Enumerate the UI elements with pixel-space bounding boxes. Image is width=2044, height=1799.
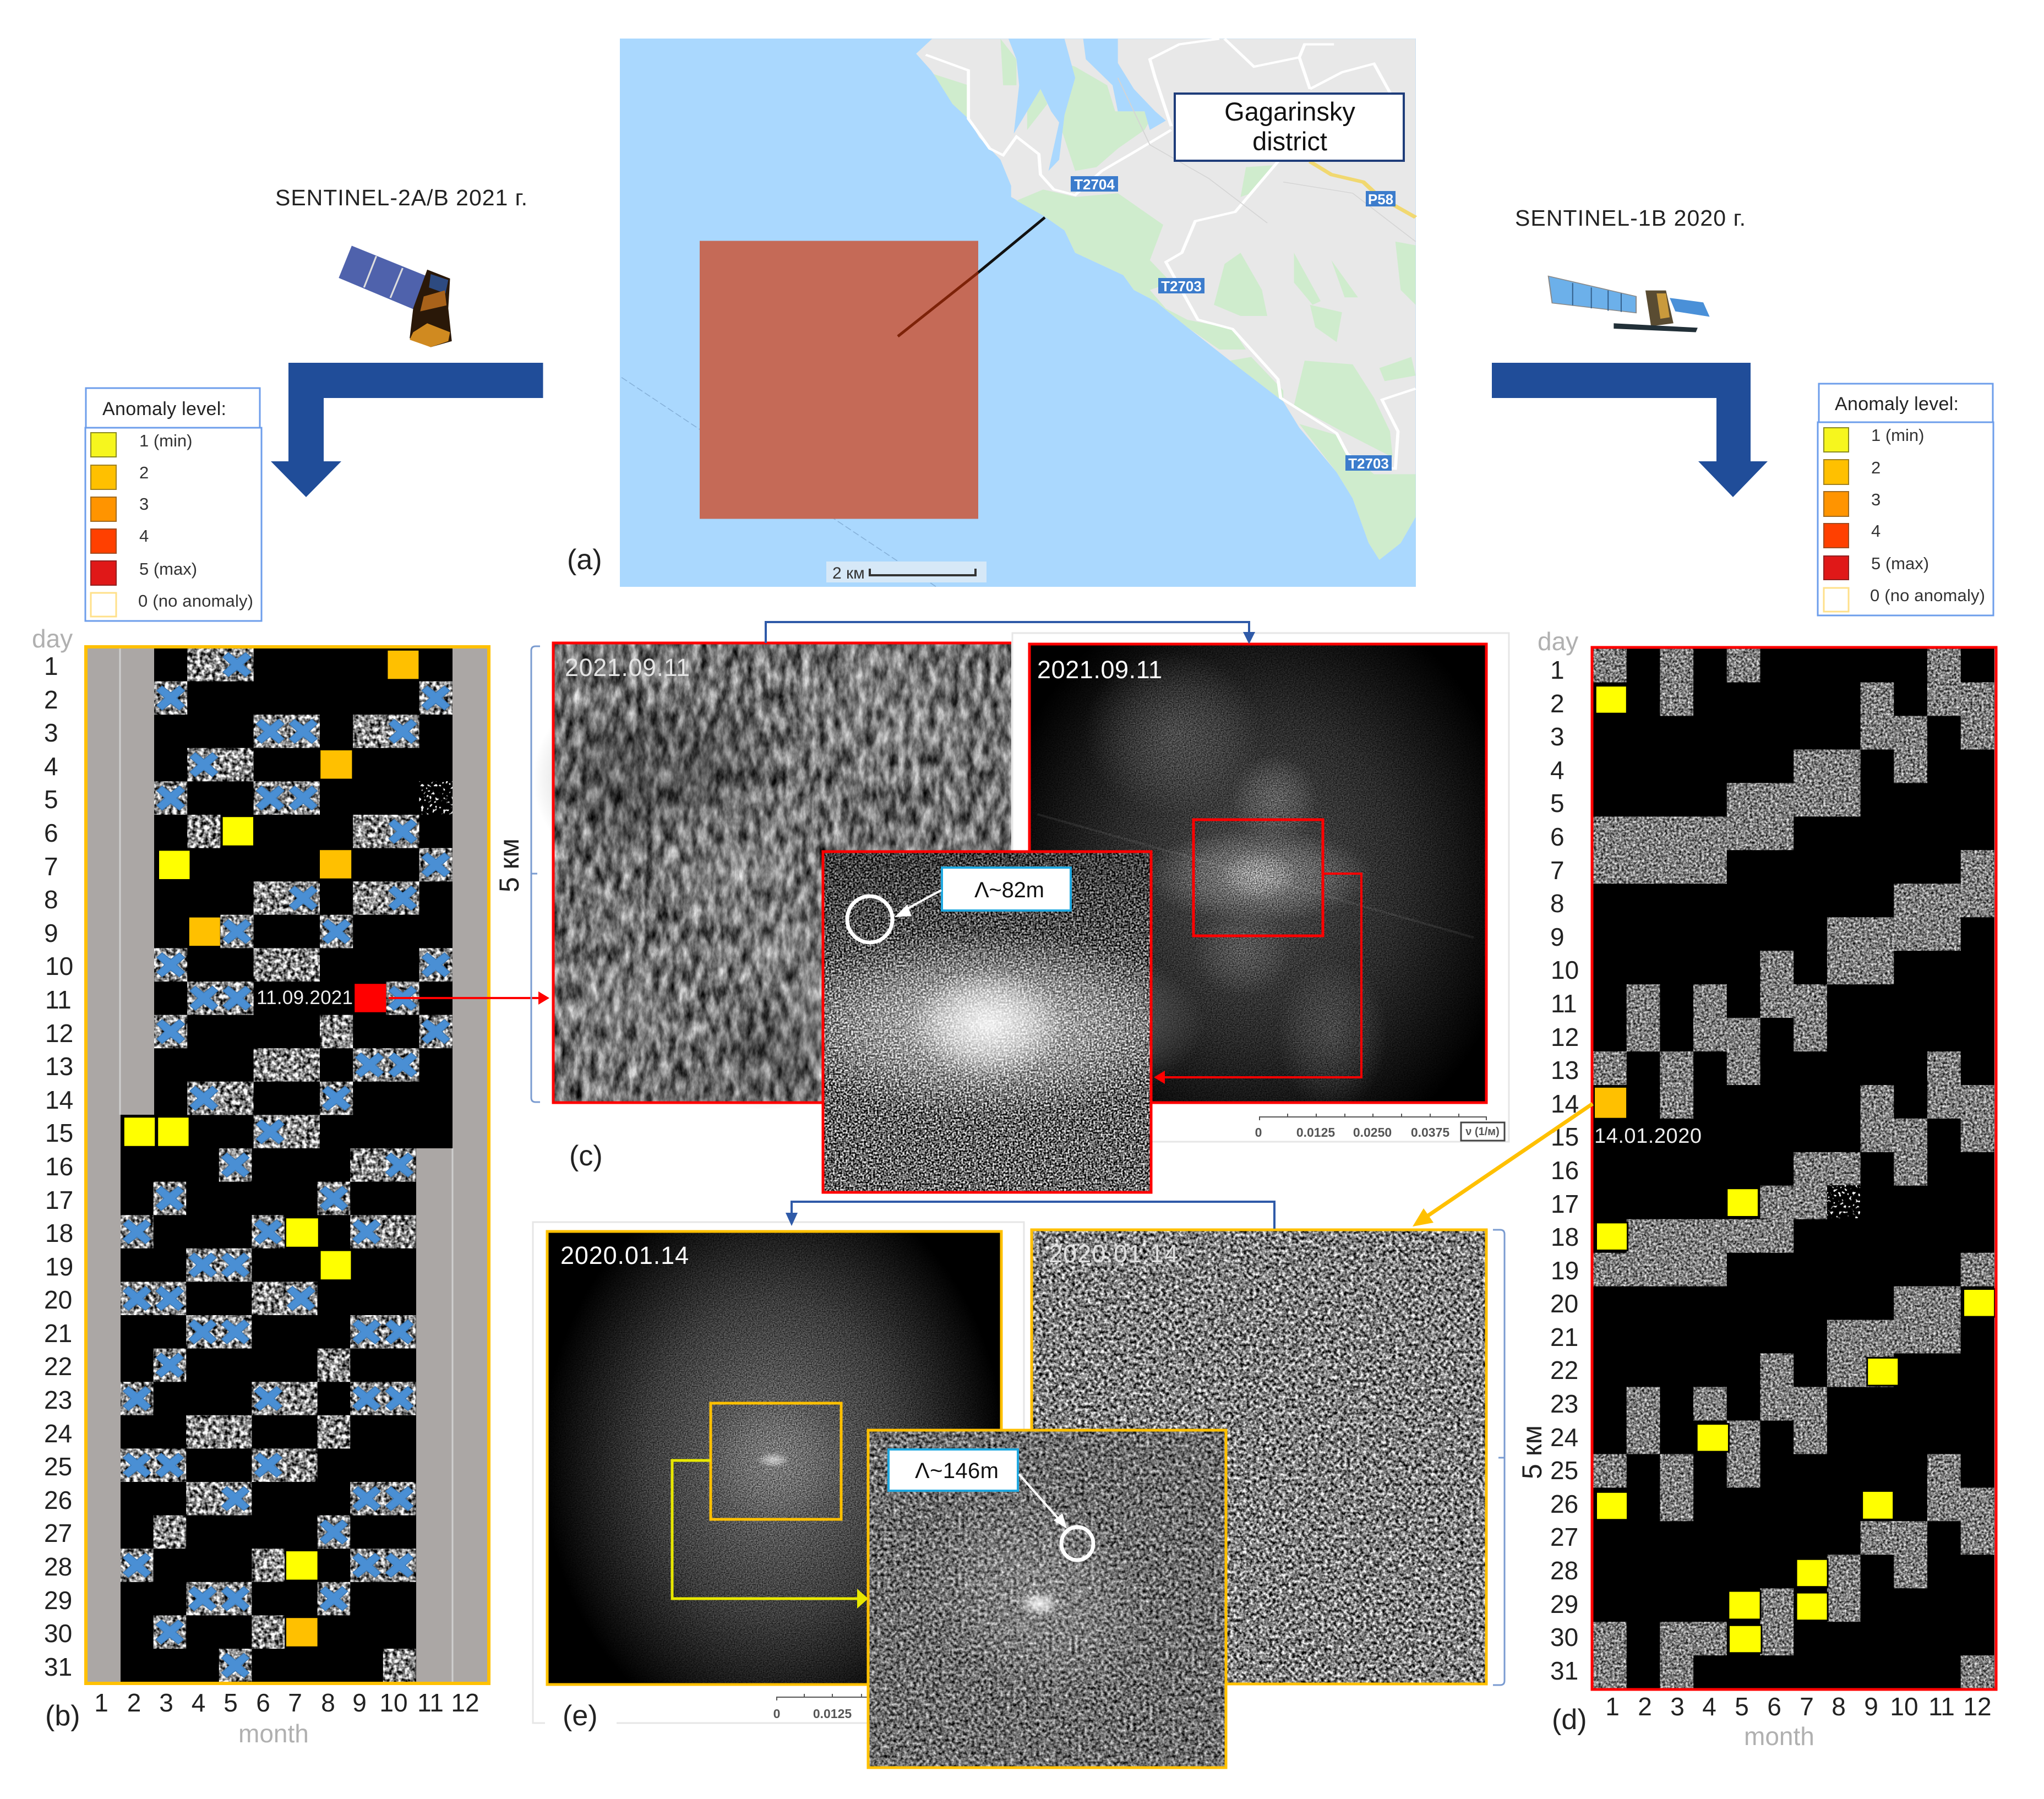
day numbers: 31 (44, 1653, 72, 1681)
legend: left anomaly level: Anomaly level: (102, 399, 226, 419)
month numbers: 5 (224, 1688, 238, 1717)
month numbers: 5 (1735, 1692, 1749, 1721)
callout pointer (895, 890, 941, 917)
spectrum image e: 2020.01.14 (560, 1241, 689, 1269)
day numbers: 17 (45, 1186, 73, 1214)
month numbers: 1 (1605, 1692, 1620, 1721)
month numbers: 10 (1890, 1692, 1918, 1721)
callout: wavelength 146 m (889, 1449, 1018, 1491)
dimension: 5 km left: 5 км (494, 838, 525, 892)
spectrum image e (547, 1231, 1001, 1684)
legend: right anomaly level: 3 (1871, 490, 1881, 509)
month numbers: 7 (288, 1688, 302, 1717)
leader line (898, 217, 1045, 336)
road sign T2703 south: T2703 (1348, 455, 1389, 472)
spectrum scale bar e (773, 1694, 881, 1721)
day numbers: 2 (1550, 689, 1565, 718)
month numbers: 12 (451, 1688, 479, 1717)
day numbers: 12 (45, 1019, 73, 1048)
zoom box on spectrum (1193, 820, 1323, 936)
panel b border (86, 647, 489, 1683)
legend: right anomaly level: 1 (min) (1871, 426, 1924, 445)
day numbers: 23 (44, 1386, 72, 1414)
label (b): (b) (45, 1700, 80, 1732)
day numbers: 16 (45, 1152, 73, 1181)
dimension: 5 km right (1493, 1230, 1547, 1685)
day numbers: 16 (1551, 1156, 1579, 1185)
spectrum frame (1012, 633, 1509, 1142)
heading: Sentinel-1B: SENTINEL-1B 2020 г. (1515, 205, 1746, 231)
road sign T2703: T2703 (1161, 278, 1202, 295)
map green areas (934, 39, 1416, 560)
panel d border (1592, 647, 1996, 1689)
day numbers: 9 (44, 919, 58, 947)
label: Gagarinsky district (1175, 94, 1404, 161)
day numbers: 11 (45, 985, 72, 1014)
month numbers: 4 (192, 1688, 205, 1717)
day numbers: 1 (44, 652, 58, 680)
spectrum scale bar e: 0.0125 (813, 1707, 852, 1721)
zoom box on spectrum e (711, 1403, 841, 1519)
label: Gagarinsky district: Gagarinsky (1224, 97, 1355, 126)
yellow connector (672, 1460, 868, 1609)
day numbers: 8 (44, 885, 58, 914)
month numbers: 10 (379, 1688, 408, 1717)
legend: right anomaly level: Anomaly level: (1835, 394, 1959, 415)
day numbers: 12 (1551, 1023, 1579, 1051)
month numbers: 3 (1670, 1692, 1685, 1721)
day numbers: 28 (1550, 1556, 1578, 1585)
day numbers: 6 (1550, 822, 1565, 851)
spectrum scale bar e: 0 (773, 1707, 780, 1721)
day numbers: 18 (1551, 1223, 1579, 1251)
day numbers: 17 (1551, 1190, 1579, 1218)
legend: left anomaly level: 4 (139, 526, 149, 546)
spectrum frame e (533, 1222, 1024, 1723)
panel (d): Sentinel-1 calendar (1538, 627, 1996, 1751)
spectrum scale bar c: ν (1/м) (1465, 1126, 1500, 1138)
spectrum image c: 2021.09.11 (1037, 656, 1162, 684)
day numbers: 11 (1551, 989, 1577, 1018)
day numbers: 5 (1550, 789, 1565, 817)
month numbers: 6 (256, 1688, 270, 1717)
zoomed inset e (868, 1430, 1226, 1768)
day numbers: 20 (44, 1285, 72, 1314)
day numbers: 5 (44, 785, 58, 814)
day numbers: 10 (45, 952, 73, 980)
blue bracket: panel c (766, 622, 1255, 644)
day numbers: 9 (1550, 923, 1565, 951)
day numbers: 21 (44, 1319, 72, 1348)
day numbers: 15 (45, 1119, 73, 1147)
day numbers: 14 (1551, 1089, 1579, 1118)
legend: left anomaly level: 5 (max) (139, 559, 197, 579)
heading: Sentinel-2A/B: SENTINEL-2A/B 2021 г. (275, 185, 527, 210)
day numbers: 7 (1550, 856, 1565, 885)
SAR image e: 2020.01.14 (1049, 1240, 1178, 1268)
axis title: day: day (32, 624, 73, 653)
legend: left anomaly level: 1 (min) (139, 431, 192, 450)
legend: right anomaly level: 2 (1871, 458, 1881, 477)
dimension: 5 km left (494, 646, 540, 1102)
day numbers: 19 (1551, 1256, 1579, 1285)
axis title: day: day (1538, 627, 1578, 656)
map land (916, 39, 1416, 560)
legend: left anomaly level: 3 (139, 494, 149, 514)
day numbers: 3 (44, 718, 58, 747)
label (d): (d) (1552, 1704, 1587, 1736)
month numbers (1605, 1692, 1992, 1721)
scale bar (826, 561, 986, 582)
day numbers: 25 (1550, 1456, 1578, 1485)
day numbers: 28 (44, 1552, 72, 1581)
day numbers: 24 (44, 1419, 72, 1448)
map inlets (1009, 39, 1166, 171)
day numbers: 15 (1551, 1122, 1579, 1151)
calendar grid b (88, 648, 487, 1682)
date label 11.09.2021: 11.09.2021 (257, 987, 353, 1008)
day numbers: 4 (44, 752, 58, 781)
arrow: right blue elbow (1492, 363, 1768, 497)
day numbers: 13 (45, 1052, 73, 1081)
month numbers: 12 (1963, 1692, 1992, 1721)
day numbers: 1 (1550, 656, 1565, 684)
road sign T2704: T2704 (1074, 176, 1115, 193)
zoomed inset c (765, 852, 1206, 1192)
day numbers: 14 (45, 1086, 73, 1114)
day numbers: 26 (44, 1486, 72, 1514)
axis title: month: month (1744, 1722, 1814, 1751)
day numbers: 2 (44, 685, 58, 714)
arrow: red date pointer to panel c (389, 991, 549, 1005)
month numbers: 3 (159, 1688, 173, 1717)
day numbers: 19 (45, 1252, 73, 1281)
axis title: month: month (238, 1719, 309, 1748)
day numbers: 24 (1550, 1423, 1578, 1452)
spectrum scale bar c: 0.0250 (1353, 1125, 1392, 1140)
marker circle (847, 896, 892, 942)
day numbers: 22 (1550, 1356, 1578, 1384)
icon: Sentinel-1 satellite (1549, 276, 1710, 332)
day numbers: 27 (44, 1519, 72, 1547)
spectrum scale bar c: 0.0375 (1411, 1125, 1449, 1140)
month numbers: 11 (417, 1688, 444, 1717)
day numbers: 6 (44, 819, 58, 847)
map panel (a) (620, 39, 1416, 587)
callout pointer (1019, 1474, 1067, 1529)
date label 14.01.2020: 14.01.2020 (1594, 1125, 1702, 1148)
day numbers: 21 (1550, 1323, 1578, 1351)
map roads (926, 39, 1416, 468)
month numbers: 2 (127, 1688, 141, 1717)
map shipping line (622, 378, 936, 587)
spectrum scale bar c (1255, 1114, 1505, 1141)
label (c): (c) (569, 1140, 603, 1172)
day numbers: 29 (44, 1586, 72, 1615)
month numbers: 9 (1864, 1692, 1878, 1721)
day numbers: 10 (1551, 956, 1579, 984)
legend: right anomaly level: 5 (max) (1871, 554, 1929, 573)
day numbers: 23 (1550, 1389, 1578, 1418)
panel (b): Sentinel-2 calendar (32, 624, 489, 1748)
dimension: 5 km right: 5 км (1517, 1425, 1547, 1479)
day numbers: 7 (44, 852, 58, 881)
callout: wavelength 82 m: Λ~82m (974, 878, 1044, 902)
legend: left anomaly level: 2 (139, 463, 149, 482)
month numbers: 8 (321, 1688, 335, 1717)
callout: wavelength 146 m: Λ~146m (915, 1459, 999, 1483)
day numbers (1550, 656, 1579, 1685)
legend: right anomaly level: 4 (1871, 521, 1881, 541)
day numbers (44, 652, 73, 1681)
month numbers: 6 (1767, 1692, 1781, 1721)
white gap behind label e (545, 1712, 617, 1734)
SAR image e (1032, 1230, 1486, 1684)
legend: right anomaly level (1818, 384, 1993, 615)
day numbers: 13 (1551, 1056, 1579, 1084)
panel (c): 2021.09.11 (533, 633, 1509, 1192)
icon: Sentinel-2 satellite (339, 246, 452, 347)
day numbers: 20 (1550, 1289, 1578, 1318)
day numbers: 30 (1550, 1623, 1578, 1651)
day numbers: 3 (1550, 722, 1565, 751)
spectrum image c (1029, 644, 1486, 1103)
month numbers: 9 (352, 1688, 367, 1717)
day numbers: 18 (45, 1219, 73, 1247)
arrow: orange date pointer to panel e (1413, 1104, 1593, 1226)
month numbers: 2 (1638, 1692, 1652, 1721)
road sign P58: P58 (1368, 191, 1393, 208)
marker circle (1061, 1527, 1093, 1560)
blue bracket: panel e (786, 1202, 1274, 1229)
month numbers: 8 (1832, 1692, 1846, 1721)
month numbers (94, 1688, 479, 1717)
arrow: left blue elbow (271, 363, 543, 497)
red connector (1154, 874, 1361, 1084)
SAR image c (533, 639, 1011, 1110)
spectrum scale bar c: 0.0125 (1296, 1125, 1335, 1140)
month numbers: 1 (94, 1688, 108, 1717)
day numbers: 29 (1550, 1590, 1578, 1618)
month numbers: 11 (1928, 1692, 1955, 1721)
day numbers: 25 (44, 1452, 72, 1481)
scale bar: 2 км (832, 564, 865, 582)
month numbers: 7 (1800, 1692, 1814, 1721)
study area square (700, 241, 978, 519)
day numbers: 8 (1550, 889, 1565, 918)
day numbers: 27 (1550, 1523, 1578, 1551)
legend: right anomaly level: 0 (no anomaly) (1870, 586, 1985, 605)
day numbers: 22 (44, 1352, 72, 1381)
day numbers: 30 (44, 1619, 72, 1648)
legend: left anomaly level: 0 (no anomaly) (138, 591, 253, 610)
day numbers: 31 (1550, 1656, 1578, 1685)
callout: wavelength 82 m (942, 868, 1071, 911)
label (e): (e) (563, 1700, 598, 1732)
label (a): (a) (567, 544, 602, 576)
panel (e): 2020.01.14 (533, 1222, 1486, 1768)
legend: left anomaly level (85, 388, 261, 621)
day numbers: 26 (1550, 1490, 1578, 1518)
label: Gagarinsky district: district (1252, 127, 1327, 156)
spectrum scale bar c: 0 (1255, 1125, 1262, 1140)
calendar grid d (1593, 648, 1995, 1689)
month numbers: 4 (1702, 1692, 1716, 1721)
SAR image c: 2021.09.11 (565, 653, 690, 682)
day numbers: 4 (1550, 756, 1565, 784)
